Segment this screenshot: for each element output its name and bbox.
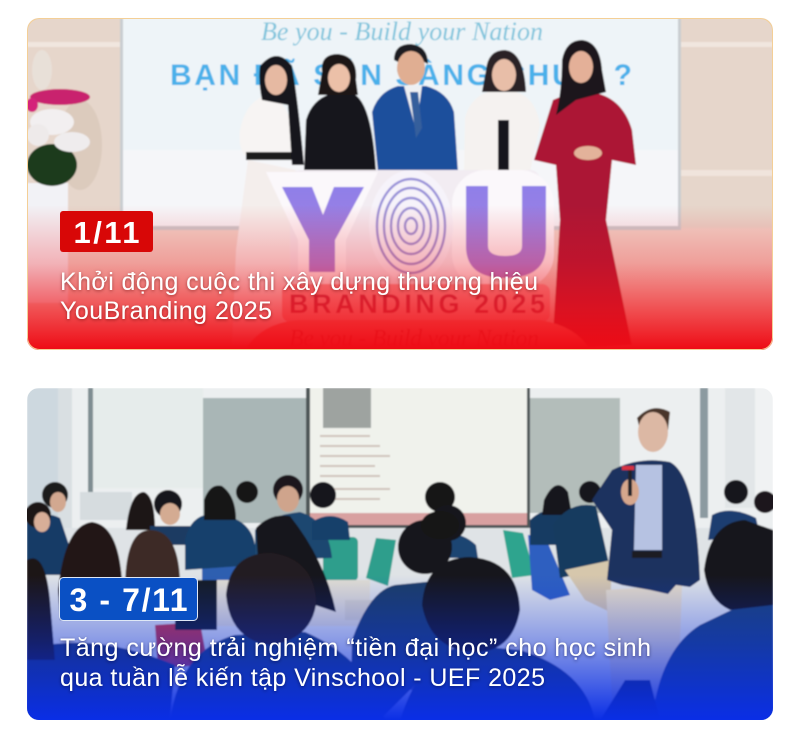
gradient overlay: red (27, 205, 773, 350)
tables (175, 580, 432, 690)
back row students (25, 475, 478, 575)
date badge: 1/11 (60, 211, 153, 252)
YOU logo sign (245, 170, 590, 352)
date badge: 1/11: 1/11 (74, 215, 140, 250)
person in blue suit (372, 44, 458, 172)
panel: event card 1/11 (27, 18, 773, 350)
presentation screen (120, 17, 681, 230)
card 1 outline (28, 18, 772, 350)
panel: event card 3 - 7/11 (27, 388, 773, 720)
caption: card 1: YouBranding 2025 (60, 297, 272, 325)
chairs (155, 530, 570, 668)
caption: card 2: qua tuần lễ kiến tập Vinschool - UEF 2025 (60, 663, 545, 692)
presenter (592, 408, 700, 700)
room background: windows and panels (27, 388, 773, 720)
foreground students (27, 511, 773, 720)
photo: launch ceremony stage (26, 17, 773, 352)
presentation screen: BẠN ĐÃ SẴN SÀNG CHƯA ? (170, 57, 632, 92)
caption: card 2: Tăng cường trải nghiệm “tiền đại học” cho học sinh (60, 634, 651, 662)
person in black blazer (304, 54, 376, 172)
caption: card 1: Khởi động cuộc thi xây dựng thương hiệu (60, 268, 538, 296)
date badge: 3 - 7/11: 3 - 7/11 (70, 582, 188, 618)
YOU logo sign: BRANDING 2025 (289, 289, 545, 319)
flower arrangement (26, 50, 102, 303)
photo: classroom (25, 388, 776, 720)
person in white blazer (464, 50, 540, 172)
seated students right (530, 480, 776, 612)
caption: card 2 (60, 634, 651, 692)
person in white shirt (232, 56, 304, 345)
caption: card 1 (60, 268, 538, 325)
person in red ao dai (534, 40, 636, 350)
gradient overlay: blue (27, 575, 773, 720)
